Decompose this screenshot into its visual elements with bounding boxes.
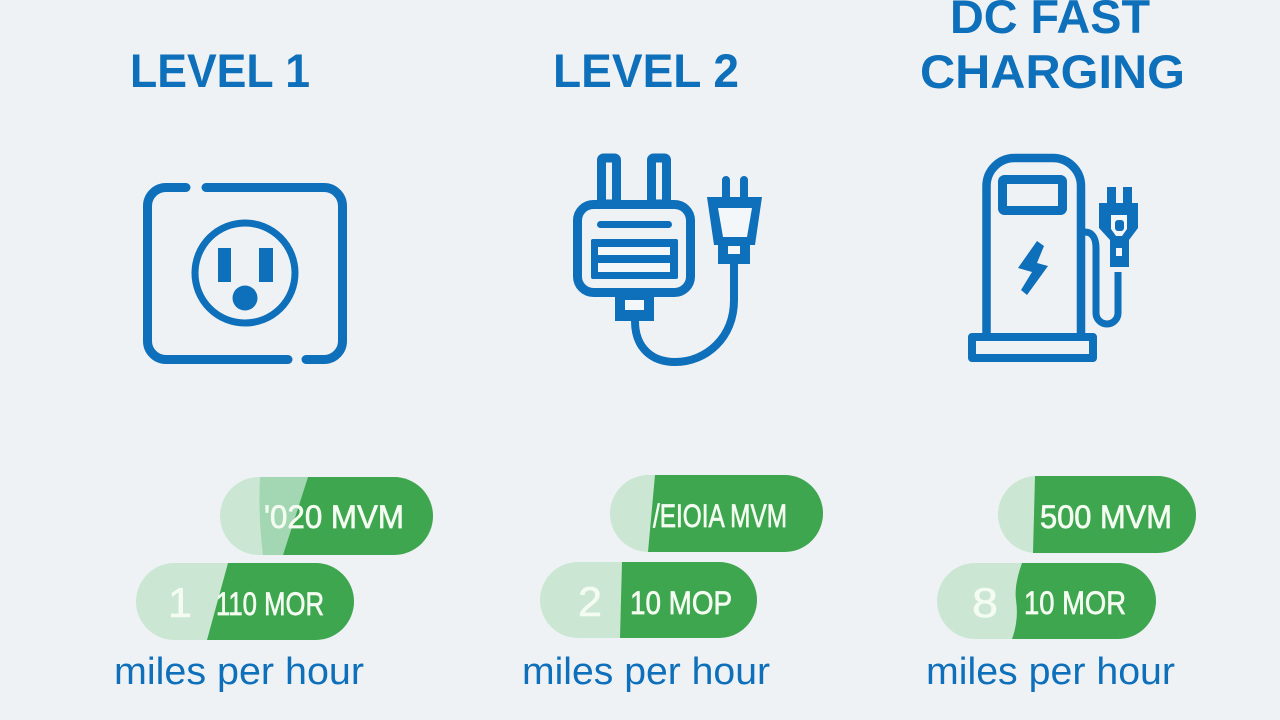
speed pill: dc fast bottom [937, 563, 1156, 639]
icon: charging station [972, 158, 1138, 358]
speed pill: level 2 top [610, 475, 823, 552]
heading: level 2: LEVEL 2 [553, 44, 739, 97]
speed pill: dc fast bottom: 10 MOR [1024, 585, 1126, 621]
speed pill: level 1 bottom [136, 563, 354, 640]
heading: dc fast charging: CHARGING [920, 45, 1185, 98]
heading: dc fast charging [920, 0, 1185, 98]
panel: level 1 [114, 44, 433, 693]
speed pill: level 2 bottom [540, 562, 757, 638]
label: miles per hour: miles per hour [926, 651, 1175, 693]
speed pill: dc fast bottom: 8 [972, 579, 998, 626]
speed pill: level 1 bottom: 1 [168, 579, 192, 626]
heading: level 1: LEVEL 1 [130, 44, 310, 97]
panel: level 2 [522, 44, 823, 693]
speed pill: level 2 top: /EIOIA MVM [653, 498, 787, 534]
speed pill: level 1 top: '020 MVM [264, 499, 404, 535]
icon: wall outlet [148, 188, 342, 360]
icon: charger adapter with cord [578, 158, 762, 362]
speed pill: level 1 bottom: 110 MOR [216, 586, 324, 622]
speed pill: level 1 top [220, 477, 433, 555]
speed pill: dc fast top: 500 MVM [1040, 499, 1172, 535]
speed pill: dc fast top [998, 476, 1196, 553]
label: miles per hour: miles per hour [522, 651, 770, 693]
label: miles per hour: miles per hour [114, 651, 364, 693]
panel: dc fast charging [920, 0, 1196, 693]
speed pill: level 2 bottom: 10 MOP [630, 585, 732, 621]
speed pill: level 2 bottom: 2 [578, 578, 602, 625]
